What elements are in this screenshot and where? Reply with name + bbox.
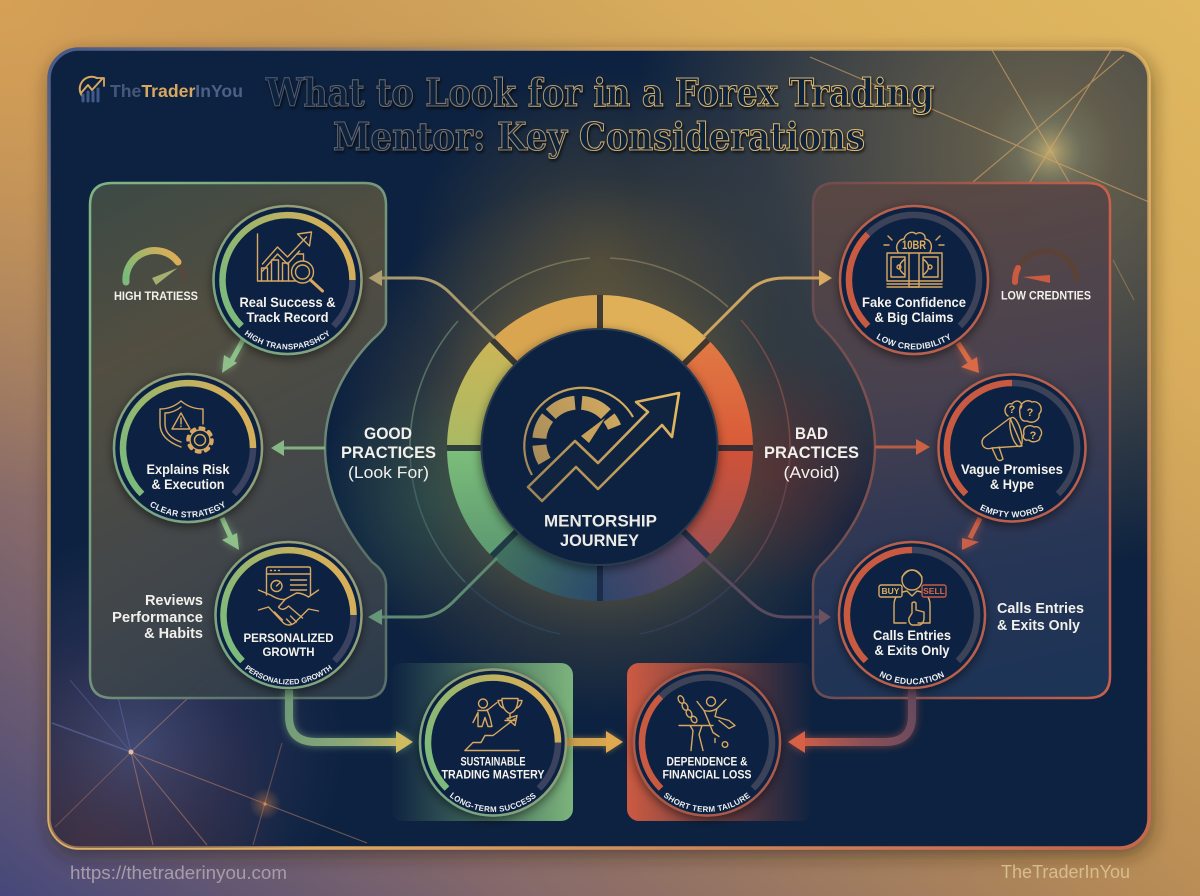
node: personalized growth: GROWTH	[262, 645, 314, 659]
node: dependence and loss	[627, 666, 784, 822]
title: What to Look for in a Forex Trading	[265, 70, 934, 115]
label: bad practices: BAD	[795, 424, 828, 443]
gauge caption: HIGH TRATIESS	[114, 291, 198, 303]
arrow: vague promises to calls entries	[962, 518, 980, 550]
icon: chart with magnifier	[258, 232, 322, 291]
label: good practices: (Look For)	[348, 463, 429, 482]
icon marks: ?	[1030, 430, 1037, 442]
side text: reviews performance: Reviews	[145, 593, 203, 609]
footer: brand: TheTraderInYou	[1001, 861, 1130, 882]
side text: calls entries: Calls Entries	[997, 601, 1084, 617]
node: real success: Track Record	[246, 310, 328, 325]
node: calls entries	[834, 540, 990, 698]
title: Mentor: Key Considerations	[333, 114, 865, 159]
label: good practices	[341, 424, 436, 482]
curved caption: HIGH TRANSPARSHCY	[244, 330, 329, 350]
node: fake confidence: & Big Claims	[874, 310, 954, 325]
thin orbit arcs	[410, 258, 790, 634]
node: calls entries: & Exits Only	[874, 643, 950, 658]
node: real success	[208, 204, 366, 362]
arrow: node 1 to node 2	[222, 340, 243, 373]
buy sell labels: BUY	[882, 586, 900, 596]
logo	[80, 77, 243, 101]
title	[265, 70, 934, 159]
node: sustainable mastery: TRADING MASTERY	[442, 770, 545, 782]
footer: url: https://thetraderinyou.com	[70, 862, 287, 883]
curved caption: LONG-TERM SUCCESS	[450, 792, 536, 812]
node label: Explains Risk	[146, 462, 230, 477]
buy sell labels: SELL	[923, 586, 945, 596]
arrow: to vague promises	[875, 439, 930, 455]
icon: falling figure and chain	[677, 695, 735, 750]
icon: climber and trophy	[465, 698, 522, 750]
panel: bad practices	[813, 183, 1110, 698]
icon marks: ?	[1009, 404, 1016, 416]
side text: reviews performance: Performance	[112, 610, 203, 626]
icon: megaphone and question clouds	[982, 401, 1042, 460]
arrow: to explains risk	[271, 440, 325, 456]
center label	[544, 512, 657, 550]
side text: reviews performance	[112, 593, 203, 642]
center label: MENTORSHIP	[544, 512, 657, 530]
icon: cash stack and badge	[884, 232, 944, 287]
icon: shield and gear	[160, 401, 212, 452]
node: vague promises	[934, 372, 1090, 530]
arrow: fake confidence to vague promises	[958, 343, 979, 373]
side text: reviews performance: & Habits	[144, 626, 203, 642]
node label: SUSTAINABLE	[460, 756, 526, 768]
arrow: to real success	[368, 270, 495, 338]
node label: Fake Confidence	[862, 295, 966, 310]
buy sell labels	[882, 586, 945, 596]
center disc	[482, 329, 718, 565]
node label: Vague Promises	[961, 462, 1063, 477]
node: dependence and loss: FINANCIAL LOSS	[662, 770, 752, 782]
node label: DEPENDENCE &	[666, 756, 748, 768]
side text: calls entries: & Exits Only	[997, 618, 1080, 634]
node: sustainable mastery	[415, 666, 574, 822]
gauge: high	[114, 251, 198, 303]
panel: good outcome highlight	[390, 663, 573, 821]
node label: Calls Entries	[873, 628, 951, 643]
icon: dashboard and handshake	[258, 567, 318, 625]
node: explains risk: & Execution	[152, 477, 224, 492]
curved caption: PERSONALIZED GROWTH	[244, 664, 332, 684]
icon marks: ?	[1027, 407, 1034, 419]
node: fake confidence	[835, 204, 993, 362]
icon: logo mark	[80, 77, 104, 101]
arrow: to personalized growth	[368, 558, 497, 625]
gauge caption: LOW CREDNTIES	[1001, 290, 1091, 302]
icon: speedometer and rising arrow	[524, 388, 679, 501]
node label: Real Success &	[240, 295, 336, 310]
arrow: node 2 to node 3	[222, 518, 239, 550]
label: good practices: PRACTICES	[341, 443, 436, 462]
node: explains risk	[109, 372, 266, 530]
curved caption: CLEAR STRATEGY	[150, 501, 224, 518]
curved caption: EMPTY WORDS	[980, 504, 1044, 518]
icon: advisor with buy and sell	[879, 570, 946, 625]
node: vague promises: & Hype	[990, 477, 1034, 492]
label: bad practices	[764, 424, 859, 482]
arrow: bad flow to dependence	[788, 690, 912, 753]
arrow: mastery to dependence	[566, 731, 623, 753]
curved caption: LOW CREDIBILITY	[876, 333, 950, 350]
node: personalized growth	[210, 540, 366, 698]
side text: calls entries	[997, 601, 1084, 634]
label: bad practices: (Avoid)	[784, 463, 840, 482]
arrow: to fake confidence	[703, 270, 832, 337]
center gauge ring	[447, 295, 753, 601]
panel: good practices	[90, 183, 386, 698]
curved caption: NO EDUCATION	[879, 671, 944, 684]
label: good practices: GOOD	[364, 424, 412, 443]
icon marks	[1009, 404, 1037, 442]
curved caption: SHORT TERM TAILURE	[664, 792, 750, 812]
label: bad practices: PRACTICES	[764, 443, 859, 462]
gauge: low	[1001, 251, 1091, 302]
arrow: to calls entries	[703, 558, 831, 625]
center label: JOURNEY	[560, 532, 639, 550]
node label: PERSONALIZED	[244, 631, 334, 645]
logo wordmark: TheTraderInYou	[110, 81, 243, 101]
panel: bad outcome highlight	[627, 663, 813, 821]
arrow: good flow to mastery	[289, 690, 413, 753]
badge figure: 10BR	[902, 240, 927, 252]
